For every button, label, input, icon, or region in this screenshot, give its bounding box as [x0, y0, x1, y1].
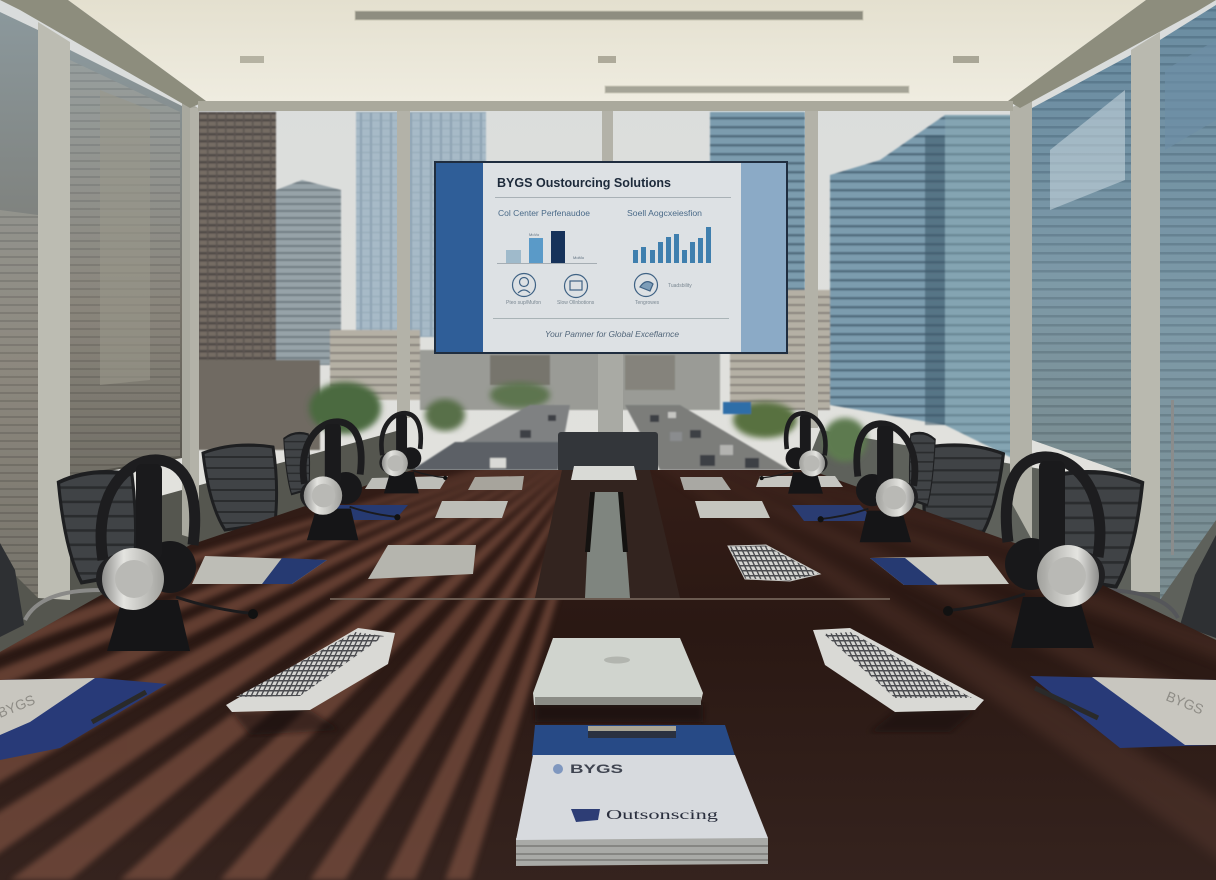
near row devices [0, 628, 1216, 760]
shadow under right keyboard [876, 711, 968, 732]
laptop [533, 638, 703, 705]
glass tower edge [925, 135, 945, 425]
road right carriageway [625, 405, 790, 470]
headset: mid right [818, 424, 918, 542]
window pane left [70, 50, 182, 478]
chair: right small [909, 433, 935, 505]
chair: left near [58, 472, 136, 582]
headset: mid left [300, 422, 400, 540]
trees far right [823, 418, 867, 462]
lamp post [1171, 400, 1174, 555]
trees left [309, 382, 381, 434]
page edge lines [516, 846, 768, 860]
distant buildings right [625, 355, 675, 390]
city skyline through back windows [198, 112, 1012, 470]
back wall mullions [190, 108, 1020, 538]
window pane right [1032, 55, 1131, 475]
wall column left [38, 22, 70, 600]
clipboard right mid blue [870, 558, 938, 585]
screen left blue band [436, 163, 483, 352]
chair: left rear [203, 445, 277, 530]
building: brown tower left [198, 112, 276, 402]
table top [0, 465, 1216, 880]
outsourcing logo mark [571, 809, 600, 822]
far tablet left [365, 476, 448, 489]
centre table panel [535, 470, 680, 598]
chair: far right edge [1180, 535, 1216, 638]
building: low cream block [330, 330, 420, 400]
road left carriageway [412, 405, 570, 470]
screen right pale band [741, 163, 786, 352]
floors on far right pane [1160, 5, 1216, 600]
headset: near left [96, 460, 258, 651]
window pane far left [0, 12, 38, 598]
conference table [0, 430, 1216, 880]
far clipboard centre [571, 466, 637, 480]
clip [588, 726, 676, 738]
wall column right [1131, 32, 1160, 592]
header beam [198, 101, 1013, 111]
keyboard right mid [728, 545, 820, 581]
clipboard near right: BYGS [1164, 688, 1206, 717]
chair: right rear [924, 445, 1003, 538]
trees left of road [425, 399, 465, 431]
reflected building left [100, 90, 150, 385]
clipboard right mid [870, 556, 1009, 585]
chair: far left edge [0, 543, 24, 637]
far clipboard right [756, 476, 843, 487]
ceiling plane [68, 0, 1146, 101]
building: blue tower right of screen [710, 112, 805, 302]
faint reflections right [709, 493, 1216, 856]
building: tall pale tower behind screen [356, 112, 486, 337]
right street level [800, 430, 1216, 650]
bar chart left: MoMo [573, 255, 585, 260]
bar chart right [633, 227, 711, 263]
middle row devices [192, 545, 1009, 585]
table seam [330, 598, 890, 600]
tagline: Your Pamner for Global Exceflarnce [545, 329, 679, 339]
building: low block left foreground [198, 360, 320, 450]
sunlight streaks on table [0, 470, 562, 880]
reflected sky far right [1165, 40, 1216, 150]
folder blue band [532, 725, 735, 756]
window pane far right [1160, 5, 1216, 600]
left wall windows [0, 12, 198, 600]
building: grey tower [276, 180, 341, 365]
wall column rear left [182, 98, 198, 540]
chair: centre far [558, 432, 658, 472]
icon: globe [634, 274, 658, 296]
bar chart left [497, 231, 597, 264]
tablet right row 2 [695, 501, 770, 518]
title rule [495, 197, 731, 198]
ceiling light left [240, 56, 264, 63]
folder logo mark [553, 764, 563, 774]
distant small buildings [490, 355, 550, 385]
icon: monitor [564, 274, 588, 298]
screen frame [434, 161, 788, 354]
vent front [355, 11, 863, 20]
tablet left row 2 [435, 501, 508, 518]
clipboard near left [0, 678, 167, 760]
heading skill: Soell Aogcxeiesfion [627, 208, 702, 218]
display screen [434, 161, 788, 354]
ceiling light centre [598, 56, 616, 63]
vent rear [605, 86, 909, 93]
folder white cover [516, 755, 768, 840]
icon: agent [512, 274, 536, 296]
tablet left mid [368, 545, 476, 579]
centre panel slot [585, 492, 630, 598]
clipboard left mid blue [262, 558, 327, 584]
road left near part [412, 442, 562, 470]
clipboard right row 2 [792, 505, 875, 521]
ceiling [0, 0, 1216, 111]
bar chart left: MoVo [529, 232, 540, 237]
footer rule [493, 318, 729, 319]
screen slide area [483, 163, 741, 352]
headset: far right [760, 413, 828, 494]
far keyboard right [680, 477, 731, 490]
folder page stack [516, 838, 768, 866]
far row devices [332, 466, 875, 521]
building reflection left [70, 60, 180, 476]
folder outsourcing label: Outsonscing [606, 808, 718, 823]
monitor stand pole [598, 350, 623, 434]
building: large glass block right [830, 115, 1012, 458]
wall column rear right [1010, 98, 1032, 540]
icon caption 2: Slow Ollnbotions [557, 300, 595, 306]
right wall windows [1010, 5, 1216, 600]
ceiling left trim [0, 0, 206, 108]
folder BYGS label: BYGS [570, 762, 623, 776]
far tablet left 2 [468, 476, 524, 490]
glass facade shade [945, 115, 1012, 458]
slide title: BYGS Oustourcing Solutions [497, 175, 671, 190]
icon caption 1: Pteo sup/Mufon [506, 300, 541, 306]
cars on road [490, 412, 759, 468]
heading call center: Col Center Perfenaudoe [498, 208, 590, 218]
floors on right pane [1032, 55, 1131, 475]
clipboard left row 2 [332, 505, 408, 520]
building reflection far left [0, 210, 38, 598]
headset: far left [379, 413, 447, 493]
shadow under laptop [535, 704, 703, 722]
chairs [0, 432, 1216, 638]
trees centre [490, 382, 550, 408]
building: cream block right [730, 290, 830, 410]
trees right of road [733, 402, 797, 438]
chair: left small [284, 433, 310, 494]
left street level [0, 430, 420, 660]
BYGS outsourcing folder [516, 725, 768, 866]
clipboard left mid [192, 556, 327, 584]
icon caption 4: Tuadsbility [668, 283, 692, 289]
road sign [723, 402, 751, 414]
slot shadow left [585, 492, 595, 552]
keyboard near right [813, 628, 984, 712]
clipboard near right [1030, 676, 1216, 748]
ceiling right trim [1008, 0, 1216, 108]
distant street haze [420, 350, 720, 410]
chair: right near [1054, 472, 1142, 587]
reflected sky right [1050, 90, 1125, 210]
chair arm right [1105, 590, 1178, 618]
slot shadow right [618, 492, 628, 552]
chair arm left [25, 590, 100, 620]
keyboard near left [226, 628, 395, 712]
ceiling light right [953, 56, 979, 63]
headset: near right [943, 457, 1105, 648]
shadow under left keyboard [232, 710, 340, 735]
icon caption 3: Tengrowes [635, 300, 660, 306]
street level behind chairs [0, 430, 1216, 660]
